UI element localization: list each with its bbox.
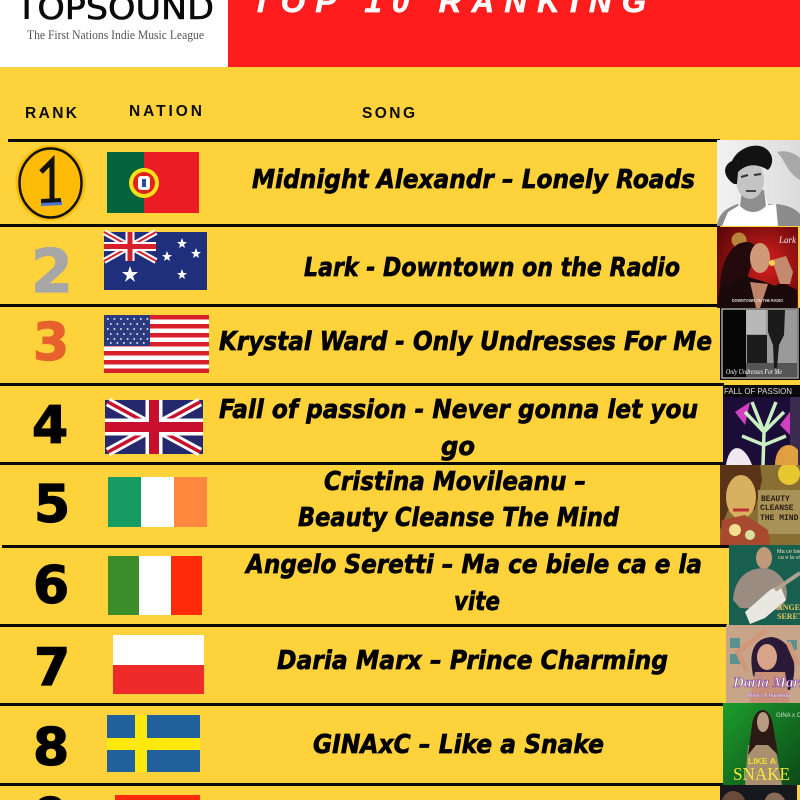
song 6: Angelo Seretti – Ma ce biele ca e la xyxy=(244,550,702,580)
song 3: Krystal Ward - Only Undresses For Me xyxy=(219,327,712,357)
rank 8: 8 xyxy=(33,718,69,778)
song 2: Lark - Downtown on the Radio xyxy=(304,253,680,283)
flag: Ireland xyxy=(108,477,207,527)
rank 6: 6 xyxy=(33,556,69,616)
flag: Australia xyxy=(104,232,207,290)
album art 2 xyxy=(717,227,798,308)
flag: United Kingdom xyxy=(105,400,203,454)
row divider lines xyxy=(0,140,730,784)
album art 8: SNAKE xyxy=(733,764,790,784)
song 7: Daria Marx – Prince Charming xyxy=(277,646,668,676)
flag: United States xyxy=(104,315,209,373)
logo panel xyxy=(0,0,228,67)
rank 1 badge xyxy=(16,145,86,221)
flag: row 9 xyxy=(115,795,200,800)
album art 5: BEAUTY xyxy=(761,495,790,504)
album art 5: THE MIND xyxy=(760,514,799,523)
rank 2: 2 xyxy=(31,237,73,307)
album art 7 xyxy=(726,625,800,703)
album art 5 xyxy=(720,463,800,545)
title banner xyxy=(228,0,800,67)
rank 4: 4 xyxy=(32,396,68,456)
album art 1 xyxy=(717,140,800,226)
song 5: Cristina Movileanu – xyxy=(324,467,586,497)
column header: song: SONG xyxy=(362,105,415,122)
column header: rank: RANK xyxy=(25,105,78,122)
logo tagline: The First Nations Indie Music League xyxy=(27,28,204,42)
rank 5: 5 xyxy=(34,475,70,535)
column header: nation: NATION xyxy=(129,103,202,120)
album art 4 xyxy=(723,385,800,465)
song 4: go xyxy=(441,432,475,462)
album art 6 xyxy=(729,545,800,625)
flag: Poland xyxy=(113,635,204,694)
song 8: GINAxC – Like a Snake xyxy=(313,730,604,760)
rank 7: 7 xyxy=(34,638,70,698)
album art 8: LIKE A xyxy=(748,756,776,766)
album art 3 xyxy=(720,308,800,380)
flag: Portugal xyxy=(107,152,199,213)
flag: Italy xyxy=(108,556,202,615)
song 6 xyxy=(244,550,702,617)
song 4 xyxy=(219,395,698,462)
album art 7: Prince Charming xyxy=(747,693,790,699)
song 1: Midnight Alexandr – Lonely Roads xyxy=(252,165,695,195)
flag: Sweden xyxy=(107,715,200,772)
album art 5: CLEANSE xyxy=(760,504,794,513)
album art 9 xyxy=(720,785,797,800)
album art 4: FALL OF PASSION xyxy=(724,386,792,396)
album art 8 xyxy=(723,703,800,785)
album art 2: Lark xyxy=(778,235,797,245)
song 5: Beauty Cleanse The Mind xyxy=(298,503,619,533)
album art 3: Only Undresses For Me xyxy=(726,367,783,376)
rank 3: 3 xyxy=(33,313,69,373)
song 5 xyxy=(298,467,619,533)
album art 2: DOWNTOWN ON THE RADIO xyxy=(732,298,783,303)
song 6: vite xyxy=(454,587,500,617)
song 4: Fall of passion - Never gonna let you xyxy=(219,395,698,425)
